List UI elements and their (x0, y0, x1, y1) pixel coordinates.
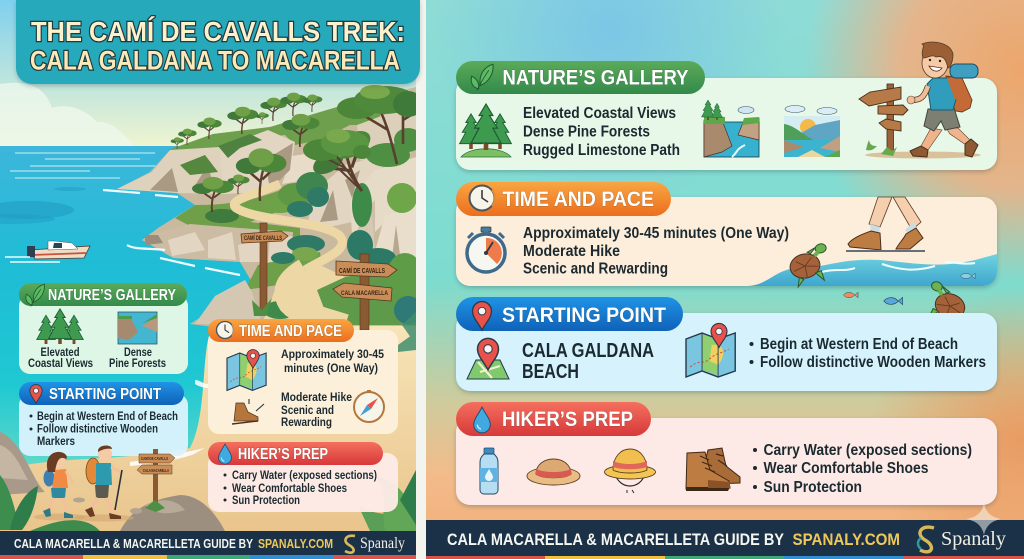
panel: time and pace (right): Scenic and Rewarding (523, 260, 668, 278)
left rock and plants (0, 432, 45, 495)
small sign (153, 449, 158, 509)
illustration: hikers on beach: CAMÍ DE CAVALLS (141, 454, 168, 461)
signpost: Cala Macarella (333, 254, 397, 330)
panel: starting point (right): CALA GALDANA (522, 339, 654, 362)
panel: hiker's prep (right) (456, 402, 997, 505)
head (922, 48, 948, 78)
panel: time and pace (right): Approximately 30-45 minutes (One Way) (523, 225, 789, 242)
panel: starting point (left): STARTING POINT (49, 386, 161, 403)
icon: turtle (786, 243, 833, 288)
signpost: Cala Macarella: CAMÍ DE CAVALLS (339, 266, 385, 275)
panel: hiker's prep (left): Wear Comfortable Shoes (232, 483, 347, 495)
panel: starting point (left): Follow distinctive Wooden (37, 424, 158, 436)
panel: time and pace (left): Moderate Hike (281, 390, 352, 404)
torso (927, 78, 958, 110)
panel: starting point (right): STARTING POINT (502, 304, 666, 327)
panel: time and pace (left) (208, 319, 398, 434)
icon: stopwatch (467, 227, 505, 272)
foam (103, 190, 240, 275)
title banner (16, 0, 420, 84)
icon: straw hat (527, 459, 580, 485)
woman (44, 470, 54, 486)
backpack (946, 76, 972, 112)
icon: water bottle (480, 448, 498, 494)
panel: nature's gallery (right): NATURE’S GALLERY (502, 66, 688, 90)
icon: bay at sunset (784, 106, 840, 157)
panel: nature's gallery (left): Pine Forests (109, 358, 166, 370)
panel: left poster illustration (0, 0, 423, 531)
illustration: hikers on beach: CALA MACARELLA (143, 468, 169, 473)
legs (921, 128, 942, 150)
trail path (234, 184, 342, 270)
signpost: Camí de Cavalls: CAMÍ DE CAVALLS (244, 234, 282, 242)
logo: Spanaly: Spanaly (941, 528, 1007, 550)
footer bar (left): CALA MACARELLA & MACARELLETA GUIDE BY (14, 536, 253, 551)
signpost: Camí de Cavalls (241, 223, 288, 316)
boat (5, 241, 90, 262)
footer bar (right): CALA MACARELLA & MACARELLETA GUIDE BY (447, 530, 785, 549)
panel: nature's gallery (left): Dense (124, 347, 152, 359)
panel: time and pace (left): Rewarding (281, 415, 332, 429)
panel: time and pace (right): TIME AND PACE (502, 188, 654, 211)
panel: right page background (426, 0, 1024, 559)
hillside and cliff base (117, 87, 416, 330)
panel: nature's gallery (left) (19, 283, 188, 374)
panel: starting point (right): Begin at Western End of Beach (760, 336, 958, 353)
panel: hiker's prep (left): Carry Water (exposed sections) (232, 470, 377, 482)
bushes (205, 128, 423, 324)
icon: location pin on map (467, 338, 509, 379)
panel: hiker's prep (right): HIKER’S PREP (502, 408, 633, 431)
illustration: hiker with signpost (859, 42, 981, 158)
footer bar (left): Spanaly (360, 535, 405, 552)
logo: Spanaly (918, 527, 1007, 552)
panel: starting point (right): Follow distinctive Wooden Markers (760, 354, 986, 371)
panel: starting point (left): Begin at Western End of Beach (37, 411, 178, 423)
title banner: CALA GALDANA TO MACARELLA (30, 46, 400, 76)
greens around the trail (175, 190, 300, 238)
signpost: Cala Macarella: CALA MACARELLA (341, 290, 388, 297)
panel: time and pace (left): Scenic and (281, 403, 334, 417)
icon: trail map (686, 323, 735, 377)
panel: hiker's prep (left): Sun Protection (232, 495, 300, 507)
water wave (747, 254, 997, 286)
icon: boots walking (846, 197, 925, 251)
title line 1: THE CAMÍ DE CAVALLS TREK: (31, 16, 405, 47)
panel: starting point (left) (19, 382, 188, 456)
panel: hiker's prep (right): Sun Protection (764, 479, 862, 496)
man (86, 458, 100, 484)
sand beach (0, 326, 416, 531)
panel: time and pace (left): TIME AND PACE (239, 323, 342, 340)
panel: time and pace (right): Moderate Hike (523, 243, 620, 260)
panel: hiker's prep (right): Carry Water (exposed sections) (764, 442, 972, 459)
panel: nature's gallery (right): Elevated Coastal Views (523, 105, 676, 122)
panel: starting point (left): Markers (37, 436, 75, 448)
footer bar (right): SPANALY.COM (792, 530, 900, 549)
panel: nature's gallery (left): Elevated (40, 347, 80, 359)
footer bar (left): SPANALY.COM (258, 536, 333, 551)
decorative fish and turtle (843, 280, 970, 329)
icon: coastal cliffs (702, 100, 759, 157)
footer bar (left) (0, 531, 416, 559)
illustration: hikers on beach (34, 446, 175, 522)
icon: sun hat with chin strap (604, 449, 656, 493)
panel: hiker's prep (right): Wear Comfortable Shoes (764, 460, 928, 477)
panel: hiker's prep (left) (208, 442, 398, 512)
icon: hiking boots (686, 448, 740, 491)
panel: time and pace (right) (456, 182, 997, 288)
panel: time and pace (left): minutes (One Way) (284, 361, 378, 375)
footer bar (right) (426, 520, 1024, 559)
panel: hiker's prep (left): HIKER’S PREP (238, 446, 328, 463)
sparkle mark (966, 503, 1001, 535)
panel: time and pace (left): Approximately 30-45 (281, 347, 384, 361)
panel: nature's gallery (right) (456, 61, 997, 170)
umbrella pines (171, 85, 423, 212)
panel: nature's gallery (left): NATURE’S GALLERY (48, 287, 176, 304)
panel: starting point (right): BEACH (522, 360, 579, 383)
panel: nature's gallery (right): Dense Pine Forests (523, 124, 650, 140)
panel: nature's gallery (right): Rugged Limestone Path (523, 142, 680, 159)
panel: nature's gallery (left): Coastal Views (28, 358, 93, 370)
panel: starting point (right) (456, 297, 997, 391)
